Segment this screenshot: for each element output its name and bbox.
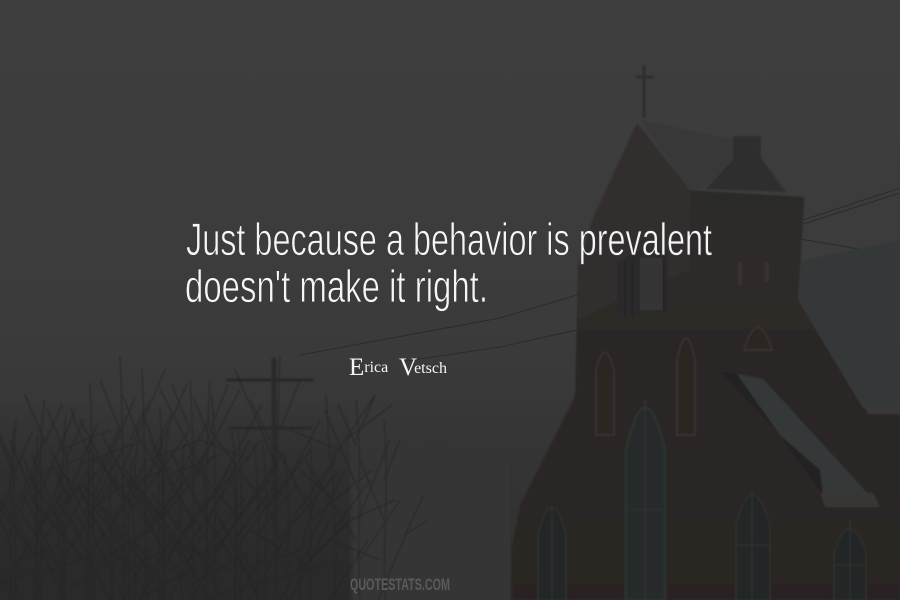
- church: [512, 65, 900, 600]
- author last name: etsch: [414, 360, 447, 377]
- arched upper windows: [596, 328, 772, 435]
- watermark: QUOTESTATS.COM: [350, 575, 450, 594]
- quote line 1: Just because a behavior is prevalent: [186, 214, 712, 265]
- chimney spire: [706, 136, 786, 192]
- nave roof front band: [863, 404, 900, 414]
- background: tree haze: [0, 400, 350, 600]
- quote text: [185, 214, 712, 312]
- upper tower shading: [578, 123, 690, 320]
- utility wires: [300, 188, 900, 362]
- large gothic window: [626, 408, 665, 600]
- small tower louvres: [740, 262, 767, 285]
- author first name: E: [349, 354, 364, 381]
- utility pole: [226, 358, 314, 600]
- cornice band: [692, 193, 804, 208]
- back roof: [640, 120, 735, 192]
- author last name: V: [399, 354, 417, 381]
- tower: [512, 123, 900, 600]
- background: distant building: [353, 433, 510, 600]
- lower arched windows: [538, 495, 866, 600]
- author first name: rica: [364, 359, 388, 376]
- belfry window: [617, 250, 668, 318]
- bare trees: [0, 355, 428, 600]
- cross on steeple: [636, 65, 654, 118]
- lower dormer roof: [720, 372, 823, 496]
- author name: [349, 354, 447, 381]
- quote line 2: doesn't make it right.: [185, 261, 488, 312]
- rear nave roof: [796, 240, 900, 408]
